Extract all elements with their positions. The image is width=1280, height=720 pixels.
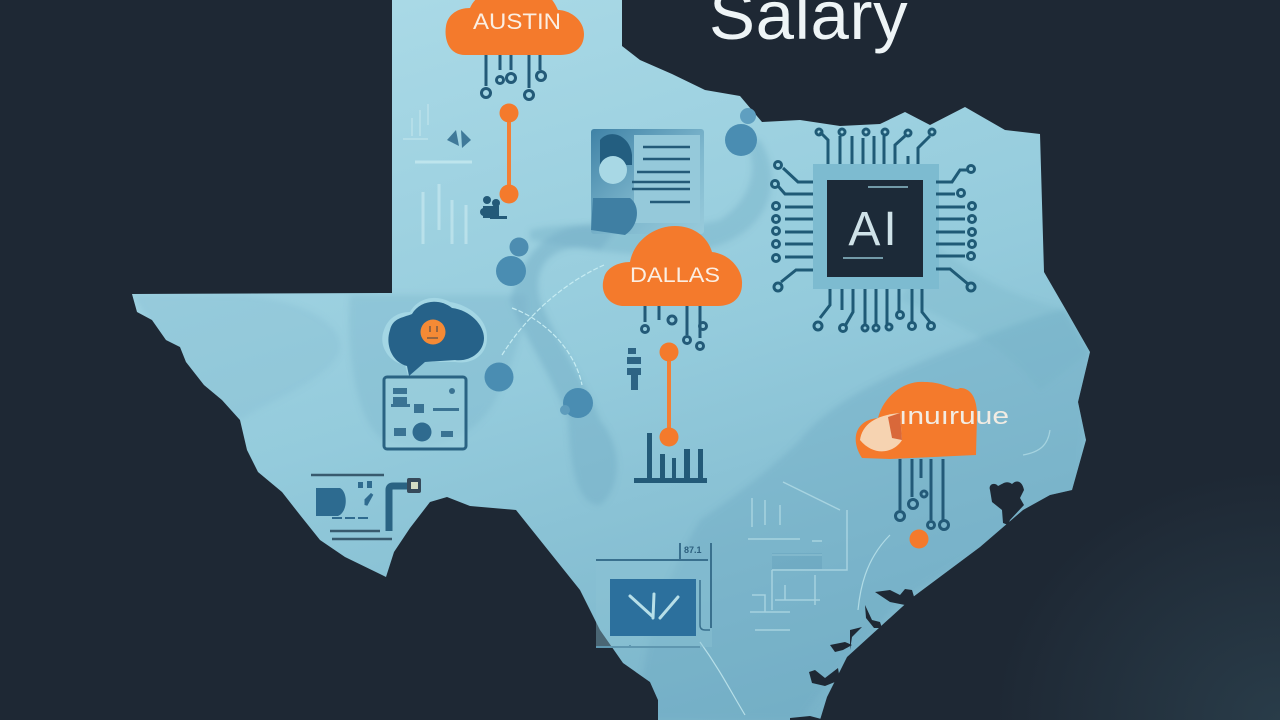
chip circuit traces — [772, 129, 976, 332]
monitor panel — [596, 543, 712, 647]
cloud: Dallas — [603, 226, 742, 350]
faint blueprint sketch — [748, 482, 847, 630]
faint bar chart icons upper left — [403, 104, 472, 244]
faint arc near the pin — [858, 535, 890, 610]
panel: lower-left device sketch — [311, 475, 421, 539]
AI chip — [772, 129, 976, 332]
bar chart — [634, 433, 707, 483]
circuit traces under Dallas — [642, 306, 706, 350]
hand-like illustration — [860, 413, 902, 451]
circuit traces under Austin — [482, 55, 546, 100]
icon: small network glyph — [480, 196, 507, 219]
label: garbled city name: ınuıruue — [899, 403, 1009, 430]
label: Austin: AUSTIN — [473, 9, 561, 34]
monitor tab text: 87.1 — [684, 545, 702, 555]
connector: Austin pin — [500, 104, 518, 204]
label: AI: AI — [848, 203, 900, 256]
cloud: Austin — [446, 0, 584, 100]
icon: stacked glyph — [627, 348, 641, 390]
icon: small leaf mark — [447, 130, 471, 148]
dashboard card — [384, 377, 466, 449]
circuit traces under third city — [896, 459, 948, 530]
speech cloud icon — [382, 298, 487, 376]
network arcs and nodes centre — [484, 238, 604, 418]
connector: Dallas pin — [660, 342, 678, 446]
cloud: third city — [856, 382, 1009, 530]
profile text lines — [632, 147, 690, 202]
location pin — [910, 530, 928, 548]
map: Texas silhouette — [132, 0, 1090, 720]
label: Dallas: DALLAS — [630, 264, 720, 287]
coastal islands — [790, 482, 1024, 720]
network nodes top right — [725, 108, 757, 156]
profile card — [591, 129, 704, 235]
